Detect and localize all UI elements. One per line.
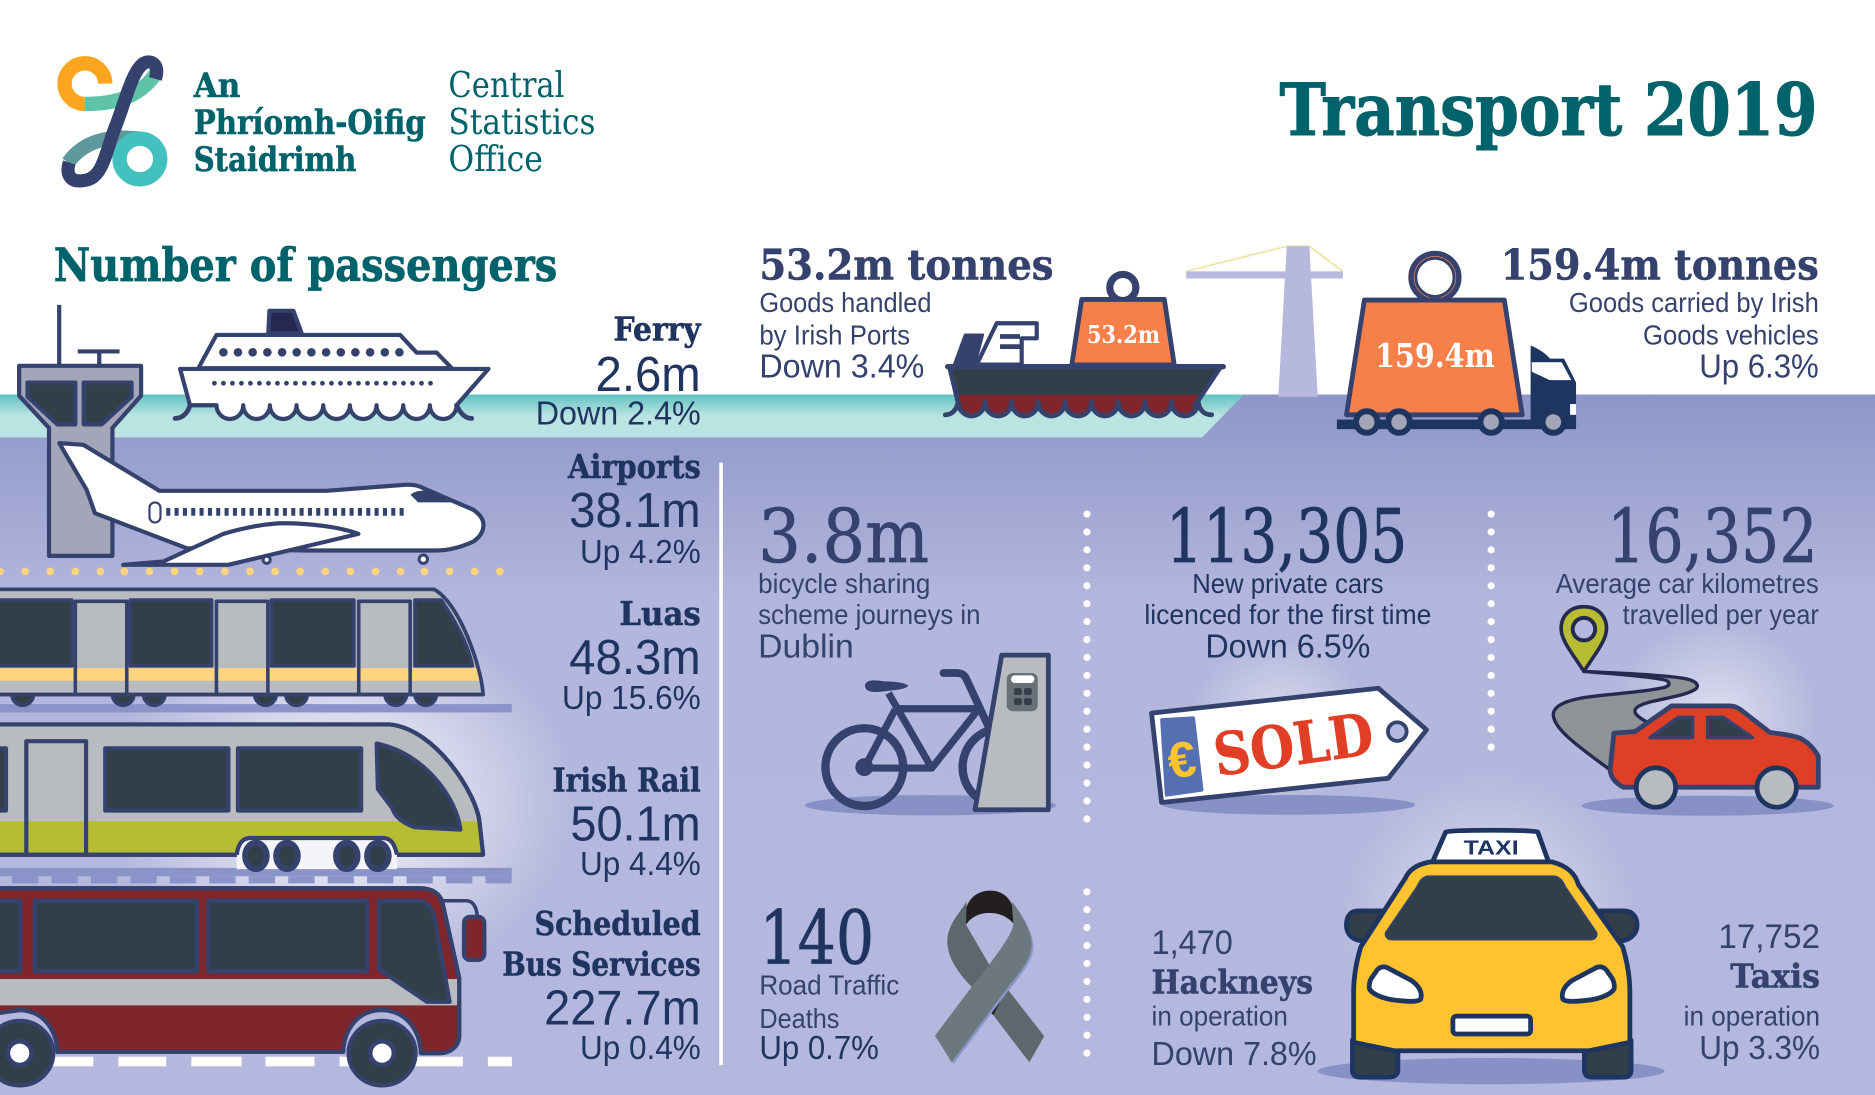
text: bicycle sharing: bicycle sharing — [758, 568, 930, 599]
logo: English name: Office — [448, 139, 543, 180]
text: goods carried by vehicles: Goods carried by Irish — [1569, 287, 1819, 318]
text: taxis — [1684, 918, 1820, 1067]
background: sea — [0, 394, 1244, 438]
text: average kilometres: Average car kilometres — [1556, 568, 1819, 599]
icon: red car — [1610, 706, 1818, 807]
label: Scheduled Bus Services: 227.7m — [544, 981, 701, 1035]
icon: bus — [0, 888, 484, 1085]
label: Scheduled Bus Services: Scheduled — [535, 905, 701, 943]
icon: taxi: TAXI — [1464, 838, 1519, 860]
icon: cargo ship with weight — [945, 274, 1223, 416]
divider — [719, 463, 723, 1065]
text: goods handled by ports — [759, 241, 1053, 386]
text: goods handled by ports: Down 3.4% — [759, 349, 924, 386]
text: goods carried by vehicles: Goods vehicles — [1643, 319, 1819, 350]
text: new private cars: licenced for the first time — [1144, 599, 1431, 630]
label: Scheduled Bus Services — [502, 905, 701, 1067]
icon: lorry with weight — [1337, 255, 1576, 433]
label: Irish Rail — [552, 761, 701, 883]
text: road deaths: Up 0.7% — [759, 1030, 879, 1067]
text: goods carried by vehicles — [1501, 241, 1819, 386]
text: new private cars: New private cars — [1192, 568, 1384, 599]
label: Irish Rail: Irish Rail — [552, 761, 701, 799]
label: Luas — [562, 595, 701, 717]
icon: crane — [1186, 246, 1343, 397]
background: glows — [108, 610, 1818, 1070]
background: ground — [0, 394, 1875, 1095]
text: road deaths: Road Traffic — [759, 970, 899, 1001]
text: average kilometres — [1556, 494, 1819, 630]
icon: plane — [59, 443, 483, 565]
text: new private cars: 113,305 — [1166, 494, 1407, 580]
icon: sold tag: SOLD — [1209, 699, 1378, 790]
text: goods handled by ports: Goods handled — [759, 287, 932, 318]
text: taxis: Taxis — [1730, 957, 1820, 995]
text: bicycle sharing: scheme journeys in — [758, 599, 981, 630]
label: Luas: Luas — [619, 595, 701, 633]
label: Luas: Up 15.6% — [562, 680, 701, 717]
logo: Irish name: Staidrimh — [194, 140, 356, 179]
text: new private cars: Down 6.5% — [1205, 628, 1370, 665]
text: road deaths — [759, 896, 899, 1067]
dotted divider 3 — [1084, 892, 1090, 1057]
label: Airports — [567, 448, 701, 571]
text: new private cars — [1144, 494, 1431, 665]
label: Irish Rail: Up 4.4% — [580, 846, 701, 883]
logo: English name: Statistics — [448, 102, 596, 143]
icon: taxi — [1318, 830, 1665, 1084]
heading: number of passengers: Number of passengers — [54, 238, 557, 292]
icon: ribbon — [935, 891, 1044, 1064]
text: bicycle sharing: 3.8m — [758, 494, 929, 580]
label: Ferry: 2.6m — [596, 348, 701, 402]
text: hackneys — [1152, 924, 1317, 1073]
label: Airports: 38.1m — [569, 484, 701, 538]
logo: English name: Central — [448, 65, 564, 106]
dotted divider 1 — [1084, 514, 1090, 825]
icon: lorry with weight: 159.4m — [1375, 337, 1495, 375]
logo: English name — [448, 65, 596, 180]
icon: sold tag — [1152, 688, 1427, 815]
logo: CSO mark — [65, 62, 160, 181]
label: Scheduled Bus Services: Bus Services — [502, 945, 701, 983]
label: Scheduled Bus Services: Up 0.4% — [580, 1030, 701, 1067]
text: goods handled by ports: by Irish Ports — [759, 319, 910, 350]
label: Ferry — [536, 311, 702, 432]
text: taxis: Up 3.3% — [1699, 1030, 1820, 1067]
icon: Luas tram — [0, 589, 512, 712]
text: road deaths: Deaths — [759, 1003, 839, 1034]
icon: cargo ship with weight: 53.2m — [1087, 321, 1160, 349]
icon: sold tag: € — [1164, 730, 1200, 790]
runway lights — [0, 568, 504, 575]
text: hackneys: Hackneys — [1152, 963, 1313, 1001]
text: taxis: in operation — [1684, 1001, 1820, 1032]
text: bicycle sharing — [758, 494, 981, 665]
text: average kilometres: travelled per year — [1623, 599, 1819, 630]
icon: road and location pin — [1553, 607, 1834, 816]
icon: bicycle at station — [805, 655, 1056, 815]
text: road deaths: 140 — [759, 896, 874, 982]
text: goods handled by ports: 53.2m tonnes — [759, 241, 1053, 290]
label: Ferry: Down 2.4% — [536, 395, 701, 432]
text: average kilometres: 16,352 — [1607, 494, 1818, 580]
logo: Irish name — [193, 66, 426, 179]
label: Airports: Up 4.2% — [580, 534, 701, 571]
label: Irish Rail: 50.1m — [570, 797, 701, 851]
label: Luas: 48.3m — [569, 631, 701, 685]
icon: control tower — [19, 305, 141, 556]
text: goods carried by vehicles: Up 6.3% — [1699, 349, 1819, 386]
text: bicycle sharing: Dublin — [758, 628, 854, 665]
label: Airports: Airports — [567, 448, 701, 486]
text: hackneys: Down 7.8% — [1152, 1036, 1317, 1073]
icon: Irish Rail train — [0, 724, 512, 883]
text: taxis: 17,752 — [1718, 918, 1820, 956]
label: Ferry: Ferry — [613, 311, 702, 349]
icon: ferry — [175, 311, 488, 419]
text: hackneys: 1,470 — [1152, 924, 1233, 962]
logo: Irish name: Phríomh-Oifig — [194, 103, 426, 142]
text: hackneys: in operation — [1152, 1001, 1288, 1032]
logo: Irish name: An — [193, 66, 240, 105]
text: goods carried by vehicles: 159.4m tonnes — [1501, 241, 1819, 290]
dotted divider 2 — [1488, 514, 1494, 750]
road markings — [6, 1057, 512, 1066]
